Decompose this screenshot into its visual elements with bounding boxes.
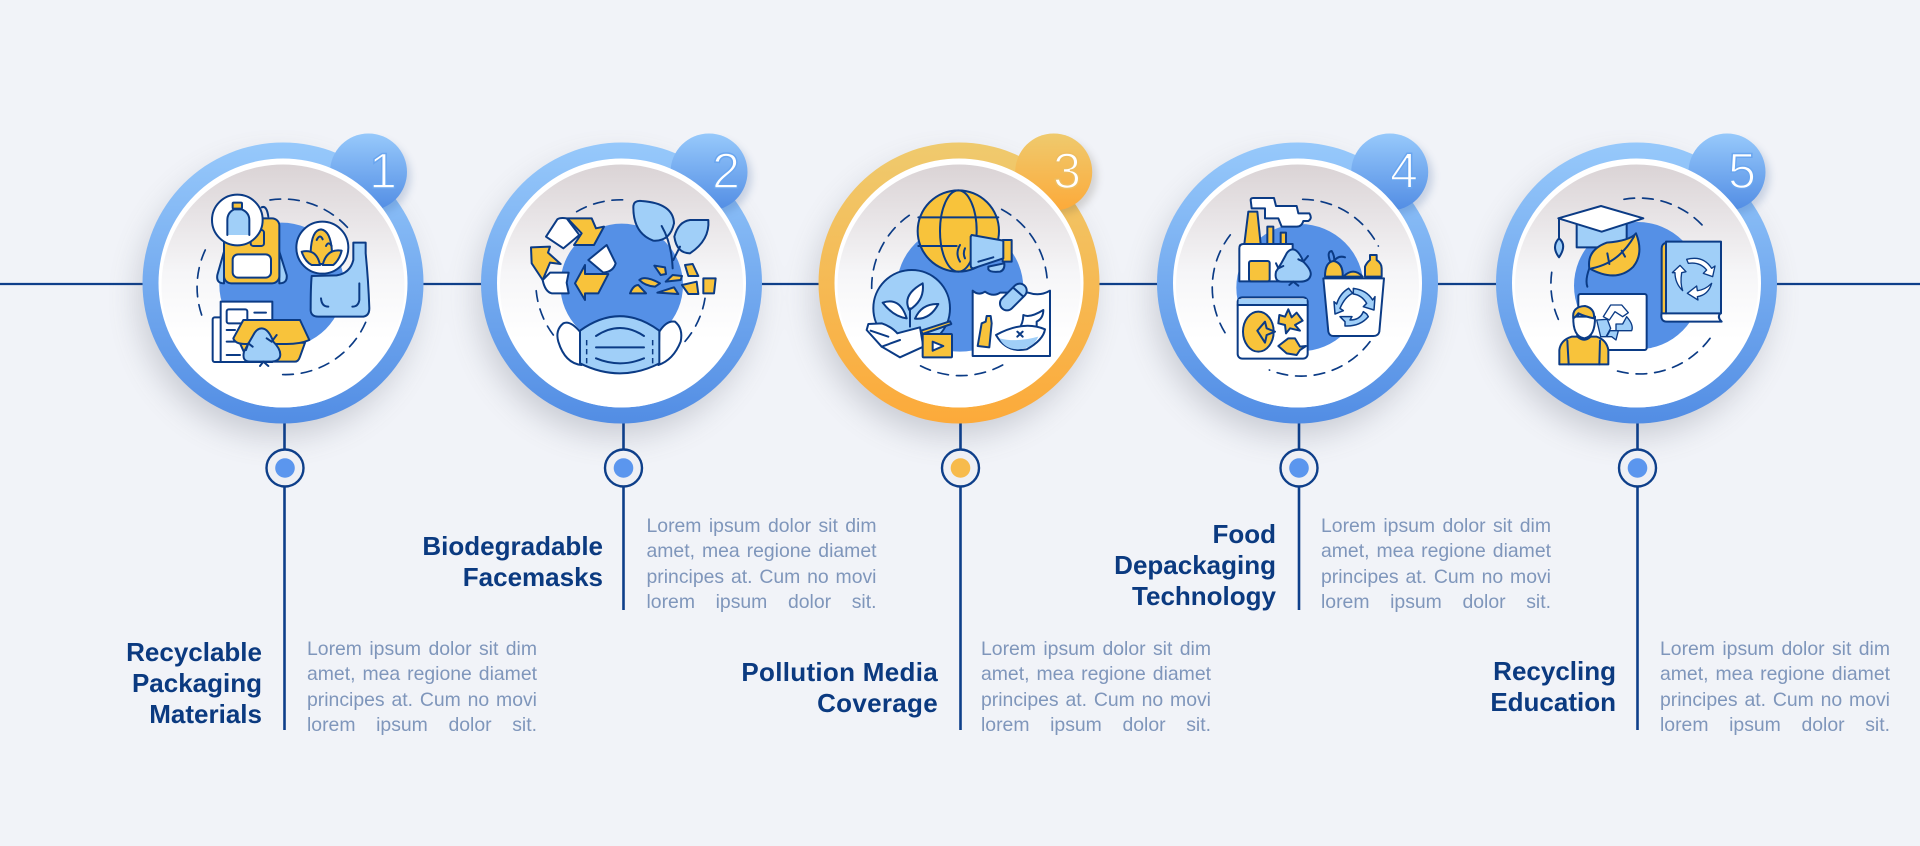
- text block: step 3 description: Lorem ipsum dolor sit dim: [981, 638, 1211, 660]
- heading: step 1 title: Recyclable: [126, 637, 262, 667]
- heading: step 3 title: [741, 656, 938, 718]
- connector 4 with node: [1280, 423, 1318, 610]
- heading: step 1 title: Packaging: [132, 668, 262, 698]
- panel: step 3 circle: [818, 134, 1100, 424]
- heading: step 5 title: [1490, 656, 1616, 717]
- text block: step 1 description: amet, mea regione diamet: [307, 663, 537, 685]
- heading: step 1 title: Materials: [149, 699, 262, 729]
- icon: food depackaging technology: [1212, 198, 1384, 376]
- text block: step 4 description: lorem ipsum dolor sit.: [1321, 591, 1551, 613]
- shadows under circles: [139, 160, 1769, 436]
- text block: step 3 description: [981, 638, 1211, 736]
- number badge 1: [330, 134, 407, 210]
- heading: step 3 title: Coverage: [817, 688, 938, 718]
- text block: step 2 description: principes at. Cum no movi: [646, 566, 876, 588]
- text block: step 2 description: amet, mea regione diamet: [646, 540, 876, 562]
- text block: step 1 description: [307, 638, 537, 736]
- heading: step 2 title: Facemasks: [463, 562, 603, 592]
- text block: step 5 description: principes at. Cum no movi: [1660, 689, 1890, 711]
- connector 2 with node: [605, 423, 642, 610]
- heading: step 5 title: Recycling: [1493, 656, 1616, 686]
- icon: pollution media coverage: [867, 190, 1050, 376]
- panel: step 4 circle: [1157, 134, 1438, 424]
- number badge 5: [1688, 134, 1766, 210]
- panel: step 2 circle: [481, 134, 762, 424]
- number badge 1: 1: [369, 143, 397, 199]
- heading: step 2 title: [422, 530, 603, 592]
- text block: step 3 description: amet, mea regione diamet: [981, 663, 1211, 685]
- heading: step 4 title: Food: [1212, 518, 1276, 548]
- panel: step 1 circle: [142, 134, 424, 424]
- connector 1 with node: [266, 423, 304, 730]
- text block: step 3 description: lorem ipsum dolor sit.: [981, 714, 1211, 736]
- panel: step 5 circle: [1496, 134, 1777, 424]
- number badge 4: [1351, 134, 1428, 210]
- heading: step 3 title: Pollution Media: [741, 656, 938, 686]
- number badge 4: 4: [1390, 143, 1418, 199]
- number badge 3: [1015, 134, 1092, 210]
- icon: recyclable packaging: [197, 195, 369, 375]
- text block: step 4 description: amet, mea regione diamet: [1321, 540, 1551, 562]
- text block: step 1 description: lorem ipsum dolor sit.: [307, 714, 537, 736]
- text block: step 5 description: lorem ipsum dolor sit.: [1660, 714, 1890, 736]
- connector 3 with node: [942, 423, 979, 730]
- heading: step 4 title: Technology: [1132, 581, 1276, 611]
- connector 5 with node: [1619, 423, 1656, 730]
- text block: step 3 description: principes at. Cum no movi: [981, 689, 1211, 711]
- text block: step 5 description: [1660, 638, 1890, 736]
- number badge 3: 3: [1053, 143, 1081, 199]
- text block: step 2 description: Lorem ipsum dolor sit dim: [646, 515, 876, 537]
- text block: step 2 description: lorem ipsum dolor sit.: [646, 591, 876, 613]
- text block: step 5 description: Lorem ipsum dolor sit dim: [1660, 638, 1890, 660]
- icon: biodegradable facemask: [531, 200, 716, 373]
- heading: step 2 title: Biodegradable: [422, 530, 603, 560]
- heading: step 4 title: [1114, 518, 1276, 611]
- icon: recycling education: [1551, 198, 1722, 374]
- number badge 2: 2: [712, 143, 740, 199]
- text block: step 4 description: principes at. Cum no movi: [1321, 566, 1551, 588]
- text block: step 5 description: amet, mea regione diamet: [1660, 663, 1890, 685]
- heading: step 5 title: Education: [1490, 687, 1616, 717]
- heading: step 4 title: Depackaging: [1114, 550, 1276, 580]
- text block: step 2 description: [646, 515, 876, 613]
- text block: step 1 description: principes at. Cum no movi: [307, 689, 537, 711]
- text block: step 1 description: Lorem ipsum dolor sit dim: [307, 638, 537, 660]
- number badge 5: 5: [1728, 143, 1756, 199]
- number badge 2: [670, 134, 748, 210]
- text block: step 4 description: [1321, 515, 1551, 613]
- text block: step 4 description: Lorem ipsum dolor sit dim: [1321, 515, 1551, 537]
- heading: step 1 title: [126, 637, 262, 729]
